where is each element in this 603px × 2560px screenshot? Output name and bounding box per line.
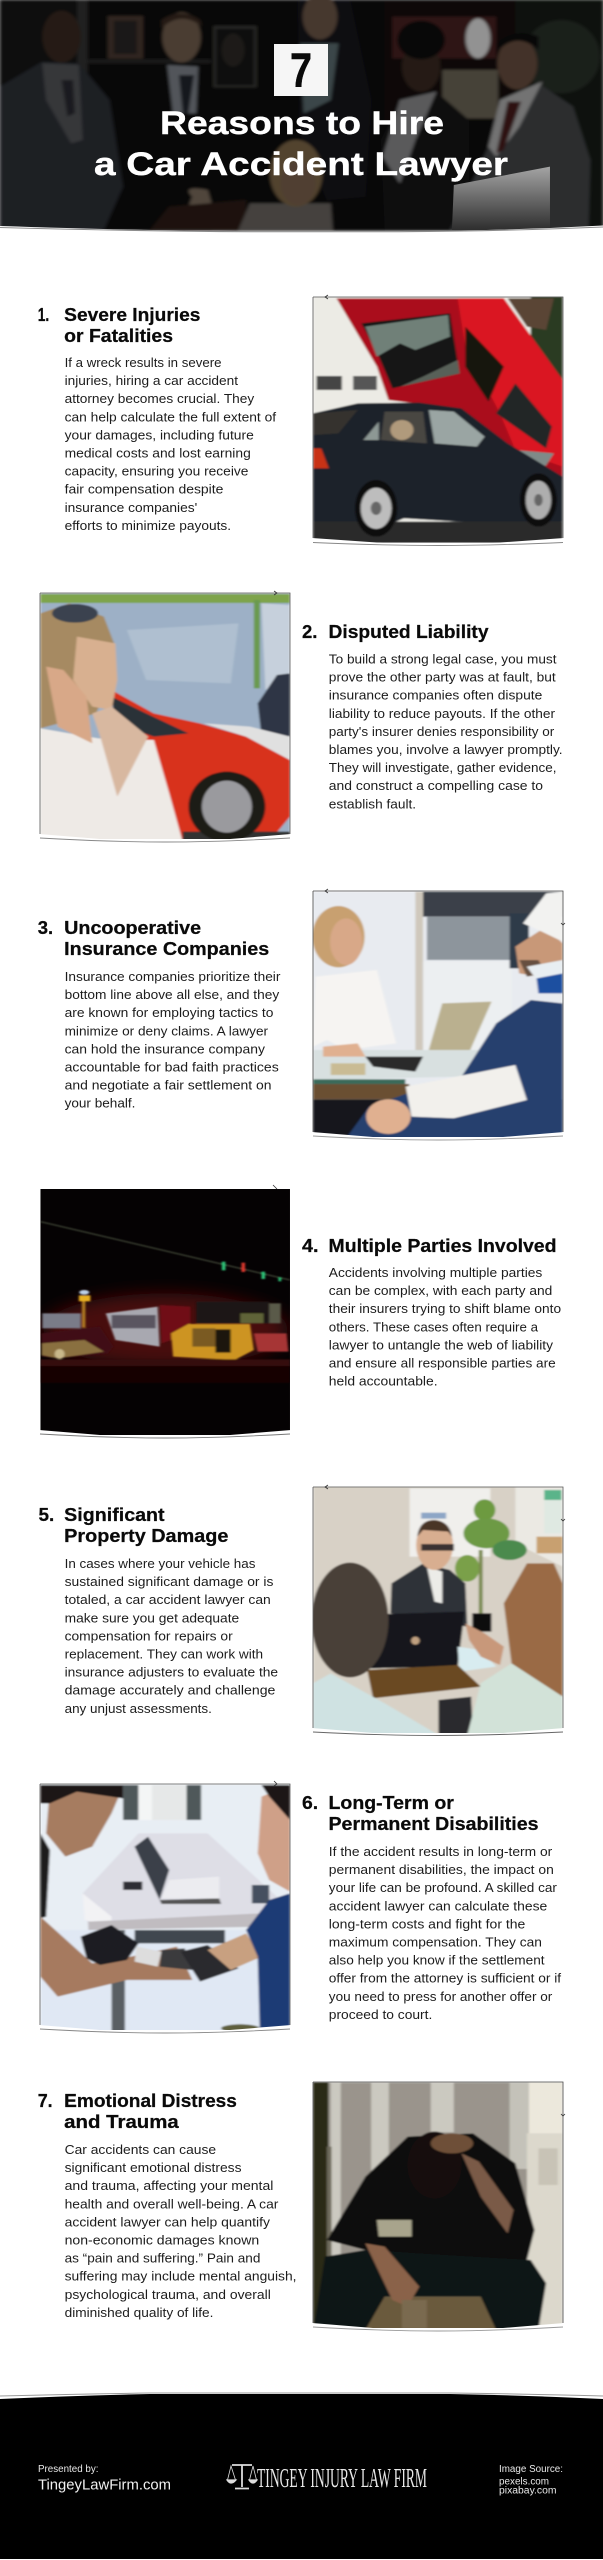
text block: reason 3 body: your behalf. [65,1097,135,1111]
panel: reason 3 [38,889,565,1143]
heading: uncooperative insurance companies: 3. [38,917,53,938]
text block: reason 6 body: offer from the attorney is sufficient or if [329,1972,562,1986]
text block: reason 3 body: and negotiate a fair settlement on [65,1079,271,1093]
text block: reason 7 body: psychological trauma, and overall [65,2288,271,2302]
text block: reason 1 body: can help calculate the full extent of [65,410,277,424]
text block: reason 1 body: medical costs and lost earning [65,446,251,460]
panel: reason 7 [38,2082,565,2334]
text block: reason 7 body: significant emotional distress [65,2161,241,2175]
text block: reason 6 body: proceed to court. [329,2008,432,2022]
text block: reason 3 body: Insurance companies prioritize their [65,970,280,984]
header: dark photo banner with title [0,0,603,240]
presented by credit: TingeyLawFirm.com [38,2476,171,2494]
text block: reason 4 body: their insurers trying to shift blame onto [329,1302,561,1316]
text block: reason 5 body: damage accurately and challenge [65,1684,275,1698]
heading: emotional distress and trauma: and Trauma [64,2111,180,2132]
footer curved highlight line [0,2393,603,2396]
text block: reason 3 body: bottom line above all else, and they [65,988,280,1002]
header curved bottom edge [0,226,603,240]
heading: significant property damage: 5. [38,1504,54,1525]
text block: reason 6 body: you need to press for another offer or [329,1990,552,2004]
heading: significant property damage: Significant [64,1504,165,1525]
panel: reason 4 [39,1185,561,1441]
heading: disputed liability: Disputed Liability [328,621,489,642]
title: a Car Accident Lawyer [94,146,508,182]
text block: reason 6 body: maximum compensation. They can [329,1936,542,1950]
text block: reason 7 body: diminished quality of life. [65,2306,213,2320]
text block: reason 4 body: lawyer to untangle the web of liability [329,1338,554,1352]
footer background with curved top edge [0,2394,603,2559]
number badge: 7: 7 [290,45,312,98]
photo frame: reason 7 [312,2082,565,2334]
text block: reason 2 body: prove the other party was at fault, but [329,671,556,685]
text block: reason 5 body: any unjust assessments. [65,1702,212,1716]
text block: reason 1 body: fair compensation despite [65,483,223,497]
heading: significant property damage [38,1504,228,1546]
photo frame: reason 6 [39,1781,291,2036]
text block: reason 7 body [65,2143,296,2320]
photo: distressed man holding head with glass [313,2082,563,2331]
text block: reason 4 body: others. These cases often require a [329,1320,538,1334]
text block: reason 1 body: If a wreck results in severe [65,356,221,370]
text block: reason 6 body: If the accident results in long-term or [329,1845,552,1859]
heading: long-term or permanent disabilities: 6. [302,1792,318,1813]
heading: emotional distress and trauma [38,2090,237,2132]
text block: reason 7 body: Car accidents can cause [65,2143,216,2157]
text block: reason 3 body: are known for employing tactics to [65,1006,273,1020]
text block: reason 5 body: totaled, a car accident lawyer can [65,1593,271,1607]
heading: disputed liability: 2. [302,621,317,642]
heading: significant property damage: Property Damage [64,1525,228,1546]
text block: reason 2 body: party's insurer denies responsibility or [329,725,554,739]
text block: reason 7 body: as “pain and suffering.” Pain and [65,2252,260,2266]
text block: reason 1 body: injuries, hiring a car accident [65,374,239,388]
text block: reason 2 body: blames you, involve a lawyer promptly. [329,743,563,757]
text block: reason 7 body: accident lawyer can help quantify [65,2215,271,2229]
text block: reason 1 body: your damages, including future [65,428,254,442]
text block: reason 2 body: To build a strong legal case, you must [329,652,557,666]
heading: severe injuries [38,304,200,346]
photo frame: reason 3 [312,889,565,1143]
photo frame: reason 1 [312,295,564,549]
panel: reason 2 [39,591,563,845]
panel: reason 6 [39,1781,562,2036]
heading: severe injuries: or Fatalities [64,325,173,346]
text block: reason 6 body: permanent disabilities, the impact on [329,1863,554,1877]
heading: long-term or permanent disabilities [302,1792,538,1834]
text block: reason 7 body: non-economic damages known [65,2234,259,2248]
text block: reason 4 body: can be complex, with each party and [329,1284,552,1298]
text block: reason 2 body: and construct a compelling case to [329,779,543,793]
heading: emotional distress and trauma: Emotional Distress [64,2090,237,2111]
heading: uncooperative insurance companies: Insurance Companies [64,938,269,959]
text block: reason 3 body: minimize or deny claims. A lawyer [65,1024,268,1038]
text block: reason 5 body: insurance adjusters to evaluate the [65,1666,278,1680]
heading: uncooperative insurance companies [38,917,269,959]
panel: reason 5 [38,1485,565,1739]
photo frame: reason 4 [39,1185,291,1441]
text block: reason 2 body: liability to reduce payouts. If the other [329,707,555,721]
title [94,105,508,182]
text block: reason 3 body: can hold the insurance company [65,1042,266,1056]
text block: reason 1 body: capacity, ensuring you receive [65,465,248,479]
heading: multiple parties involved: 4. [302,1235,318,1256]
presented by credit: Presented by: [38,2464,98,2475]
text block: reason 7 body: health and overall well-being. A car [65,2197,278,2211]
text block: reason 7 body: suffering may include mental anguish, [65,2270,296,2284]
text block: reason 6 body: long-term costs and fight for the [329,1917,525,1931]
heading: long-term or permanent disabilities: Permanent Disabilities [328,1813,538,1834]
image source credit: pexels.com [499,2476,549,2488]
photo frame: reason 2 [39,591,291,845]
photo frame: reason 5 [312,1485,565,1739]
photo: multi-vehicle accident at night [40,1189,290,1437]
image source credit: Image Source: [499,2464,563,2475]
text block: reason 6 body: accident lawyer can calculate these [329,1899,547,1913]
text block: reason 2 body [329,652,563,811]
heading: emotional distress and trauma: 7. [38,2090,53,2111]
text block: reason 4 body [329,1266,561,1389]
text block: reason 5 body: replacement. They can work with [65,1648,263,1662]
heading: severe injuries: Severe Injuries [64,304,200,325]
text block: reason 4 body: Accidents involving multiple parties [329,1266,542,1280]
text block: reason 3 body [65,970,280,1111]
heading: uncooperative insurance companies: Uncooperative [64,917,201,938]
text block: reason 2 body: insurance companies often dispute [329,689,542,703]
panel: reason 1 [38,295,564,549]
text block: reason 6 body: your life can be profound. A skilled car [329,1881,557,1895]
text block: reason 5 body: make sure you get adequate [65,1611,239,1625]
logo: Tingey Injury Law Firm: TINGEY INJURY LAW FIRM [257,2463,427,2493]
photo: woman on phone beside crashed red car [40,593,290,842]
heading: severe injuries: 1. [38,304,49,325]
icon: scales of justice [227,2465,257,2488]
text block: reason 6 body [329,1845,562,2022]
footer: black band with credits [0,2393,603,2559]
text block: reason 4 body: and ensure all responsible parties are [329,1356,556,1370]
title: Reasons to Hire [160,105,444,141]
text block: reason 1 body [65,356,277,533]
text block: reason 1 body: insurance companies' [65,501,197,515]
logo: Tingey Injury Law Firm [227,2463,427,2493]
text block: reason 5 body: sustained significant damage or is [65,1575,273,1589]
heading: long-term or permanent disabilities: Long-Term or [328,1792,454,1813]
photo: lawyer meeting couple at desk [312,1487,563,1735]
text block: reason 5 body [65,1557,278,1716]
text block: reason 2 body: They will investigate, gather evidence, [329,761,556,775]
text block: reason 1 body: attorney becomes crucial. They [65,392,255,406]
text block: reason 6 body: also help you know if the settlement [329,1954,545,1968]
text block: reason 7 body: and trauma, affecting your mental [65,2179,273,2193]
image source credit [499,2464,563,2496]
heading: multiple parties involved: Multiple Parties Involved [328,1235,556,1256]
header photo: group of lawyers [0,0,603,231]
text block: reason 2 body: establish fault. [329,797,416,811]
photo: red car crashed on top of black car [313,297,563,543]
photo: prosthetic arm fitting at workbench [40,1784,290,2033]
text block: reason 5 body: In cases where your vehicle has [65,1557,255,1571]
photo: injured man with lawyer at glass desk [312,892,563,1140]
text block: reason 4 body: held accountable. [329,1375,438,1389]
text block: reason 3 body: accountable for bad faith practices [65,1060,279,1074]
number badge: 7 [274,44,328,98]
presented by credit [38,2464,171,2494]
image source credit: pixabay.com [499,2486,556,2496]
text block: reason 1 body: efforts to minimize payouts. [65,519,231,533]
text block: reason 5 body: compensation for repairs or [65,1629,233,1643]
